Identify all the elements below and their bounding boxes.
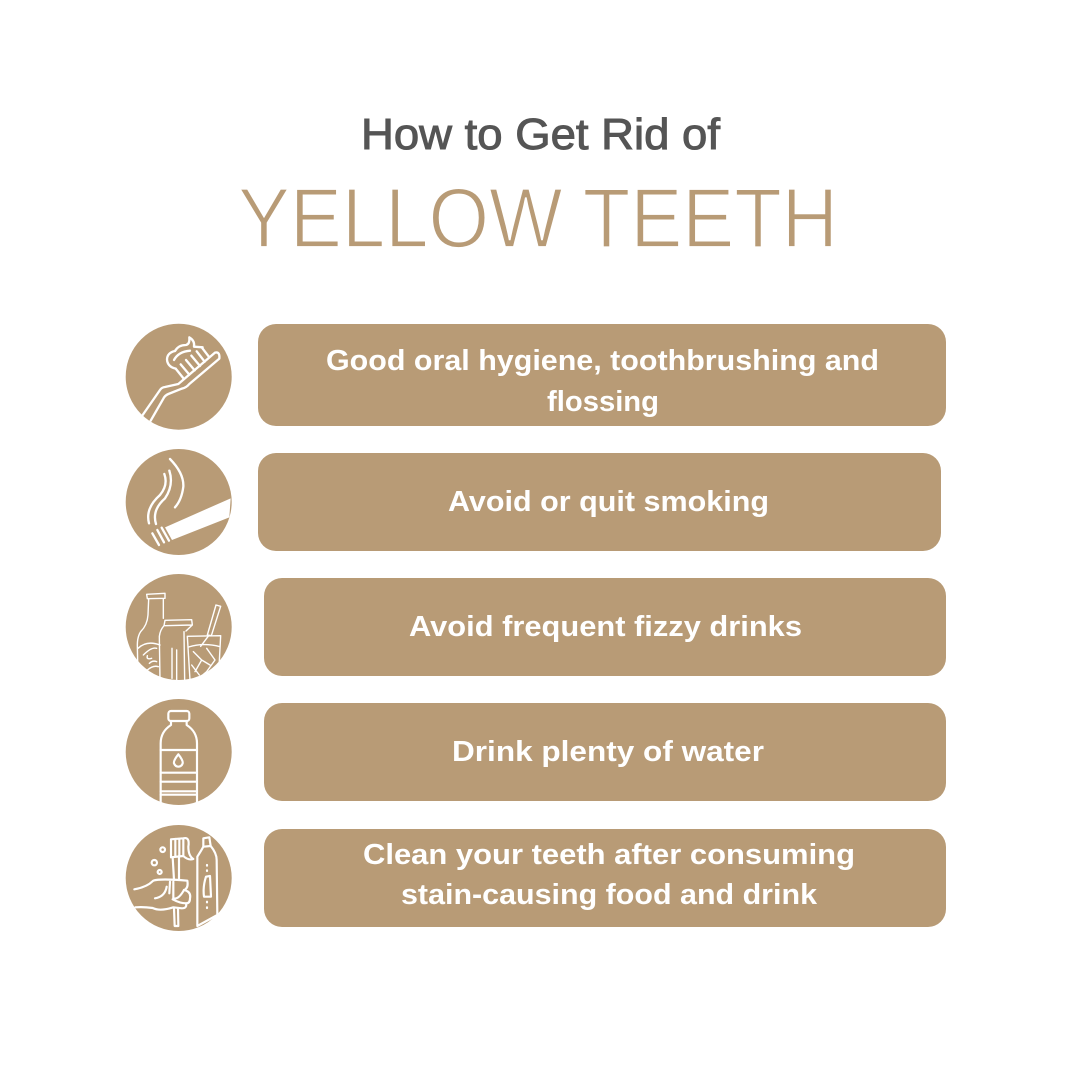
icon: toothbrush with toothpaste <box>126 324 232 430</box>
heading: YELLOW TEETH: YELLOW TEETH <box>238 171 838 265</box>
icon: water bottle <box>126 699 232 805</box>
text: avoid fizzy drinks: Avoid frequent fizzy drinks <box>409 611 802 643</box>
panel: avoid smoking <box>258 453 941 551</box>
panel: good oral hygiene <box>258 324 946 426</box>
text: drink water: Drink plenty of water <box>452 736 764 768</box>
panel: avoid fizzy drinks <box>264 578 946 676</box>
text: avoid smoking: Avoid or quit smoking <box>448 486 769 518</box>
text: clean teeth after staining food <box>363 839 855 911</box>
icon: fizzy drinks <box>126 574 232 680</box>
icon: cigarette with smoke <box>126 449 232 555</box>
icon: hand holding toothbrush and electric brush <box>126 825 232 931</box>
text: good oral hygiene <box>326 345 879 418</box>
panel: clean teeth after staining food <box>264 829 946 927</box>
text: good oral hygiene: flossing <box>547 386 659 418</box>
panel: drink water <box>264 703 946 801</box>
text: clean teeth after staining food: Clean your teeth after consuming <box>363 839 855 871</box>
title: How to Get Rid of: How to Get Rid of <box>361 110 721 159</box>
text: clean teeth after staining food: stain-causing food and drink <box>401 879 818 911</box>
text: good oral hygiene: Good oral hygiene, toothbrushing and <box>326 345 879 377</box>
